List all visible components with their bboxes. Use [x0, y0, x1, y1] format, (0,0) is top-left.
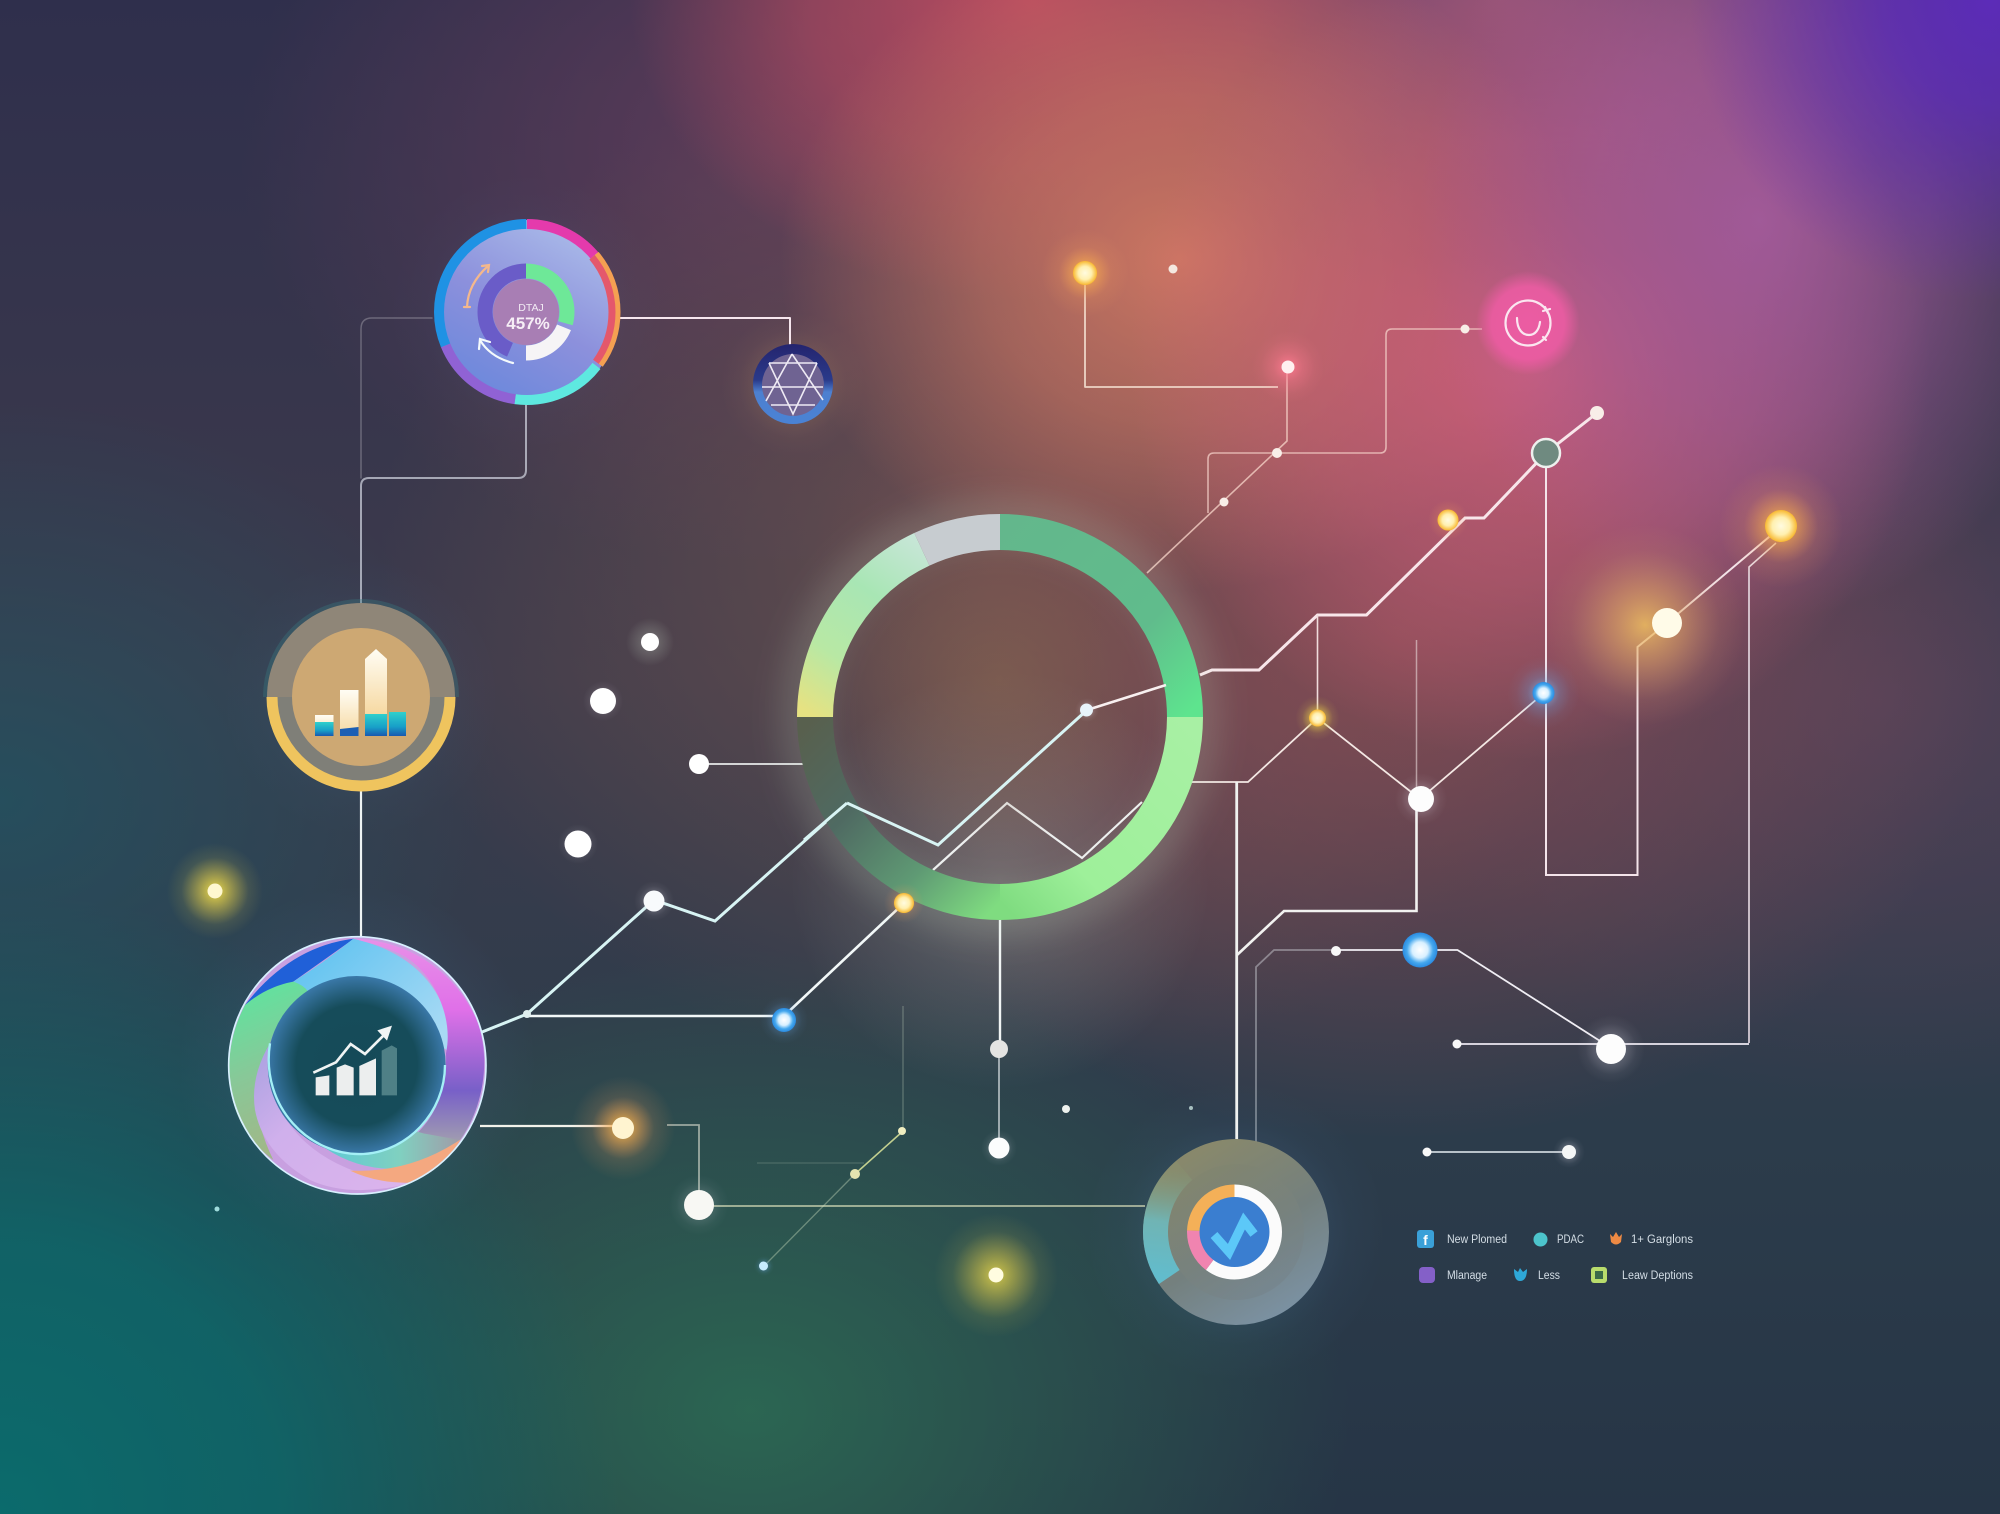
- rising network lines: [1191, 413, 1782, 1152]
- node: yellow centre: [1296, 696, 1340, 740]
- icon: four bars: [315, 649, 406, 736]
- icon: smile badge: [1476, 271, 1580, 375]
- legend icon: flame: [1610, 1232, 1622, 1244]
- legend icon: square: [1591, 1267, 1607, 1283]
- inner disc: [268, 976, 446, 1154]
- icon: check line: [1214, 1221, 1254, 1252]
- legend text: Garglons: 1+ Garglons: [1631, 1234, 1693, 1246]
- node: grey ring: [1532, 439, 1560, 467]
- node: small pale dots: [214, 1105, 1193, 1212]
- node: small junction: [523, 1010, 531, 1018]
- node: amber: [1428, 500, 1468, 540]
- node: blue small: [754, 1256, 774, 1276]
- connector lines: top right: [1085, 273, 1482, 573]
- legend icon: New Plomed: f: [1423, 1232, 1428, 1248]
- node: yellow left: [167, 843, 263, 939]
- top donut gauge with value: [435, 220, 619, 404]
- node: large white lower right: [1577, 1015, 1645, 1083]
- legend text: New Plomed: New Plomed: [1447, 1234, 1507, 1246]
- node: blue chart: [760, 996, 808, 1044]
- value text: 457%: [506, 314, 550, 333]
- left and centre chart lines: [480, 764, 1145, 1266]
- donut: [1194, 1191, 1276, 1273]
- check badge: [1143, 1139, 1329, 1325]
- node: connector dots: [1220, 324, 1604, 506]
- node: gold lower: [1545, 525, 1745, 725]
- bar chart badge: [265, 601, 457, 791]
- legend text: Less: Less: [1538, 1270, 1560, 1282]
- legend text: PDAC: PDAC: [1557, 1234, 1584, 1246]
- icon: growth bars and arrow: [313, 1026, 397, 1095]
- node: top orange: [1041, 229, 1129, 317]
- node: stem dots: [981, 1040, 1017, 1166]
- legend text: Leaw Deptions: Leaw Deptions: [1622, 1270, 1693, 1282]
- node: yellow bottom: [934, 1213, 1058, 1337]
- legend icon: tulip: [1514, 1268, 1527, 1281]
- icon: cycle arrows: [464, 265, 513, 363]
- node: gold on ring: [884, 883, 924, 923]
- node: white centre: [1395, 773, 1447, 825]
- icon: hexagram badge: [753, 344, 833, 424]
- connector lines: top left: [361, 318, 790, 940]
- node: chart mid: [1075, 698, 1099, 722]
- node: lower right dots: [1331, 946, 1462, 1156]
- node: free white dots: [558, 618, 709, 864]
- glowing nodes: [167, 229, 1843, 1337]
- ambient glows around main circles: [177, 172, 1386, 1382]
- value text: DTAJ: [518, 302, 544, 314]
- legend icon: PDAC: [1534, 1232, 1548, 1246]
- node: white large lower: [669, 1175, 729, 1235]
- node: blue lower: [1402, 932, 1438, 968]
- gold half ring: [272, 697, 450, 786]
- swirl segments: [229, 939, 484, 1190]
- central progress ring: [804, 521, 1196, 913]
- node: pink: [1252, 331, 1324, 403]
- node: top dot: [1168, 264, 1178, 274]
- legend icon: New Plomed: [1417, 1230, 1434, 1248]
- node: blue right: [1508, 657, 1580, 729]
- node: gold right: [1719, 464, 1843, 588]
- swirl badge with growth icon: [229, 937, 486, 1194]
- node: orange lower left: [571, 1076, 675, 1180]
- teal ring segment: [1155, 1170, 1184, 1277]
- legend icon: Manage: [1419, 1267, 1435, 1283]
- node: white end: [1553, 1136, 1585, 1168]
- node: chart left: [634, 881, 674, 921]
- value text: [506, 302, 550, 333]
- legend: [1417, 1230, 1693, 1283]
- legend text: Manage: Mlanage: [1447, 1270, 1487, 1282]
